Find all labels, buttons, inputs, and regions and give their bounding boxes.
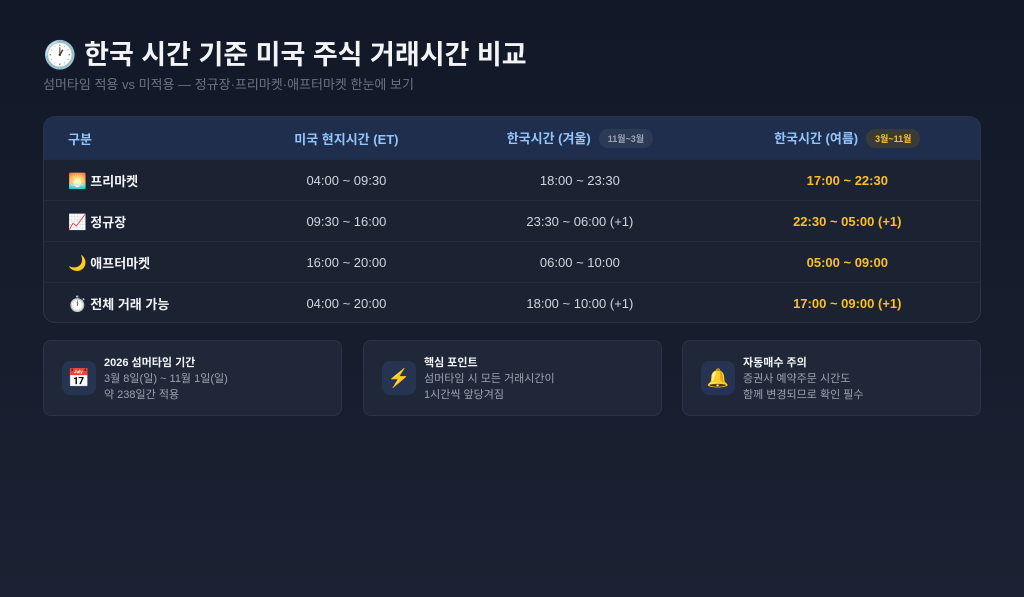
row: total: 17:00 ~ 09:00 (+1) — [793, 296, 901, 310]
row: total — [44, 282, 980, 323]
card: summer time period — [43, 340, 342, 416]
table header: 한국시간 (여름) — [774, 131, 858, 146]
subtitle: 섬머타임 적용 vs 미적용 — 정규장·프리마켓·애프터마켓 한눈에 보기 — [43, 77, 414, 92]
row: aftermarket: 🌙 애프터마켓 — [68, 254, 150, 272]
card: auto trading caution: 증권사 예약주문 시간도 — [743, 373, 850, 385]
row: premarket: 04:00 ~ 09:30 — [306, 172, 386, 188]
table header: 11월~3월 — [608, 134, 644, 144]
card: auto trading caution — [682, 340, 981, 416]
table header: 3월~11월 — [875, 134, 911, 144]
row: regular: 23:30 ~ 06:00 (+1) — [526, 214, 633, 228]
title: 🕐 한국 시간 기준 미국 주식 거래시간 비교 — [43, 40, 527, 70]
table header: 구분 — [68, 132, 92, 146]
icon: bell: 🔔 — [707, 368, 729, 388]
row: aftermarket: 16:00 ~ 20:00 — [306, 254, 386, 270]
card: key point — [363, 340, 662, 416]
table — [43, 116, 981, 323]
row: regular: 📈 정규장 — [68, 214, 126, 230]
row: premarket: 🌅 프리마켓 — [68, 172, 138, 190]
row: premarket: 18:00 ~ 23:30 — [540, 172, 620, 188]
row: total: ⏱️ 전체 거래 가능 — [68, 296, 169, 312]
row: total: 18:00 ~ 10:00 (+1) — [526, 296, 633, 310]
table header — [44, 117, 980, 159]
card: summer time period: 2026 섬머타임 기간 — [104, 357, 195, 369]
row: premarket: 17:00 ~ 22:30 — [807, 172, 888, 188]
icon: bell — [701, 361, 735, 395]
row: aftermarket — [44, 241, 980, 282]
row: premarket — [44, 159, 980, 200]
card: auto trading caution: 함께 변경되므로 확인 필수 — [743, 389, 864, 401]
icon: lightning: ⚡ — [388, 368, 410, 388]
card: summer time period: 약 238일간 적용 — [104, 389, 179, 401]
row: regular: 09:30 ~ 16:00 — [306, 214, 386, 228]
row: total: 04:00 ~ 20:00 — [306, 296, 386, 310]
card: key point: 핵심 포인트 — [424, 357, 478, 369]
card: auto trading caution: 자동매수 주의 — [743, 357, 807, 369]
icon: calendar — [62, 361, 96, 395]
card: key point: 섬머타임 시 모든 거래시간이 — [424, 373, 555, 385]
card: key point: 1시간씩 앞당겨짐 — [424, 389, 504, 401]
table header: 미국 현지시간 (ET) — [294, 132, 399, 146]
row: regular: 22:30 ~ 05:00 (+1) — [793, 214, 901, 228]
icon: calendar: 📅 — [68, 368, 90, 388]
row: aftermarket: 05:00 ~ 09:00 — [807, 254, 888, 270]
card: summer time period: 3월 8일(일) ~ 11월 1일(일) — [104, 373, 228, 385]
row: regular — [44, 200, 980, 241]
icon: lightning — [382, 361, 416, 395]
table header: 한국시간 (겨울) — [507, 131, 591, 146]
row: aftermarket: 06:00 ~ 10:00 — [540, 254, 620, 270]
